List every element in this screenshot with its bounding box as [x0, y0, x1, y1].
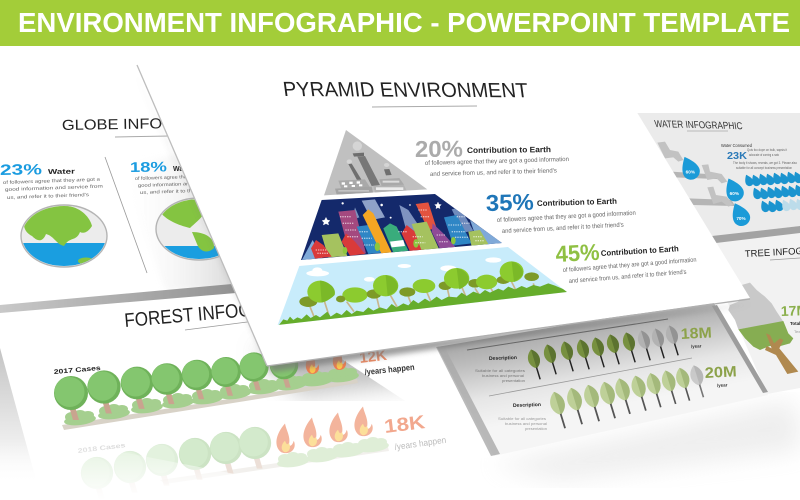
stat: 23% water: [0, 161, 103, 201]
icon: tree filled to level: [728, 283, 798, 374]
stat: 18M: 18M: [680, 324, 712, 343]
stat: 18% water: Water: [173, 166, 192, 173]
water consumed text: [721, 143, 797, 170]
panel: tree infographic slide: [700, 226, 800, 394]
panel: globe infographic slide: [0, 118, 231, 288]
stat: 20% contribution: 20%: [415, 136, 463, 162]
floor shadow under slides: [490, 400, 800, 480]
panel: forest infographic slide: [0, 284, 446, 488]
description 2: Description: [513, 402, 541, 409]
stat: 23% water: of followers agree that they are got a: [3, 177, 100, 186]
stat: 45% contribution: 45%: [555, 239, 600, 267]
description 2: presentation: [525, 426, 547, 431]
forest slide heading: FOREST INFOGRAPHIC: [124, 293, 317, 332]
row: 2018 cases: 2018 Cases: [77, 442, 126, 455]
stat: 45% contribution: of followers agree that they are got a good information: [563, 256, 697, 274]
stat: 23% water: Water: [48, 169, 75, 176]
water slide heading: WATER INFOGRAPHIC: [654, 119, 743, 132]
stat: 17M: [781, 302, 800, 334]
water pipes and drops: 70%: [736, 216, 747, 221]
stat: 35% contribution: and service from us, and refer it to their friend's: [502, 222, 624, 235]
panel: pyramid environment main slide: [137, 65, 750, 366]
leaf row 1: [525, 324, 684, 381]
stat: 35% contribution: 35%: [485, 189, 534, 216]
stat: 18K: 18K: [383, 412, 427, 438]
description 2: Suitable for all categories: [498, 416, 546, 421]
panel: water infographic slide: [630, 113, 800, 238]
description 2: [498, 402, 547, 431]
flames 2018: [276, 406, 373, 453]
drop grid: [742, 170, 800, 213]
stat: 18% water: good information and service from: [138, 180, 226, 189]
pyramid tier: city: [301, 194, 503, 262]
description 2: business and personal: [505, 421, 547, 426]
pyramid tier: factory: [324, 130, 427, 195]
row: 2017 cases: 12K: [358, 347, 388, 367]
stat: 20M: [704, 363, 737, 388]
description 1: business and personal: [482, 373, 524, 378]
row: 2017 cases: [54, 347, 415, 430]
water consumed text: Quis foo dope on bulk, sapsis it: [747, 148, 787, 152]
stat: 20M: /year: [717, 382, 728, 388]
stat: 20% contribution: Contribution to Earth: [467, 145, 551, 155]
stat: 20% contribution: of followers agree that they are got a good information: [425, 156, 569, 167]
stat: 18% water: of followers agree that they are got a: [135, 173, 223, 182]
stat: 35% contribution: [485, 189, 636, 235]
stat: 18K: /years happen: [394, 435, 447, 452]
stat: 35% contribution: of followers agree that they are got a good information: [497, 210, 636, 224]
icon: globe Americas: [155, 198, 220, 261]
water pipes and drops: 60%: [686, 170, 696, 175]
icon: globe Asia: [20, 205, 110, 269]
stat: 23% water: us, and refer it to their friend's: [7, 192, 90, 201]
stat: 23% water: 23%: [0, 161, 42, 179]
stat: 18K: [383, 412, 447, 452]
water consumed text: 23K: [727, 151, 748, 162]
heading: PYRAMID ENVIRONMENT: [282, 78, 530, 102]
stat: 20% contribution: and service from us, and refer it to their friend's: [430, 167, 557, 178]
row: 2017 cases: /years happen: [364, 362, 415, 377]
main slide shadow: [133, 68, 752, 372]
left side shadow: [0, 348, 36, 480]
row: 2017 cases: 2017 Cases: [54, 365, 102, 376]
stat: 45% contribution: Contribution to Earth: [601, 244, 679, 258]
water pipes and drops: 60%: [730, 191, 740, 196]
row: 2018 cases: [77, 427, 389, 499]
description 1: presentation: [502, 378, 525, 383]
stat: 18% water: 18%: [130, 158, 168, 175]
stat: 45% contribution: and service from us, and refer it to their friend's: [569, 269, 687, 285]
panel: leaf chart slide: [436, 300, 768, 456]
water pipes and drops: [657, 142, 753, 229]
bottom fade of forest slide: [0, 440, 250, 500]
stat: 20M: 20M: [704, 363, 737, 382]
leaf row 2: [547, 363, 709, 430]
globe slide heading: GLOBE INFOGRAPHIC: [62, 115, 237, 134]
description 1: [475, 355, 525, 383]
stat: 18M: /year: [691, 343, 702, 349]
stat: 35% contribution: Contribution to Earth: [537, 197, 617, 208]
description 1: Description: [489, 355, 517, 362]
description 1: Suitable for all categories: [475, 368, 525, 373]
pyramid tier: forest: [278, 247, 567, 328]
banner title: ENVIRONMENT INFOGRAPHIC - POWERPOINT TEMPLATE: [18, 7, 790, 38]
header banner: [0, 0, 800, 46]
stat: 23% water: good information and service from: [5, 184, 103, 193]
stat: 18% water: us, and refer it to their friend's: [140, 187, 221, 196]
water consumed text: Water Consumed: [721, 143, 753, 148]
stat: 20% contribution: [415, 136, 569, 178]
water consumed text: advocate of coming a nato: [749, 153, 779, 157]
stat: 18% water: [130, 158, 226, 196]
stat: 45% contribution: [555, 239, 697, 285]
